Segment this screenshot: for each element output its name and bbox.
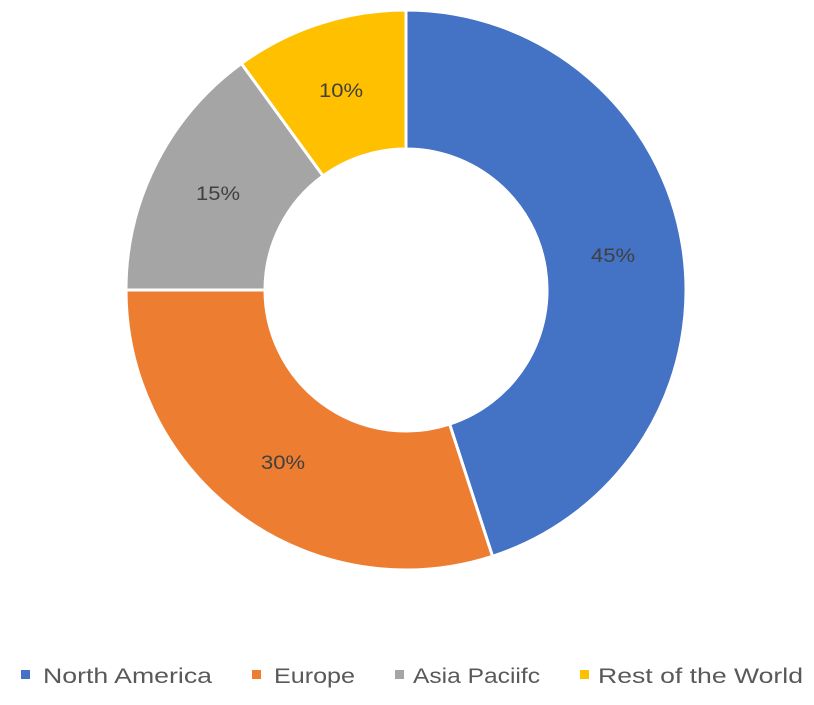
segment: Asia Pacific 15%	[126, 64, 323, 290]
legend item: North America: North America	[43, 665, 212, 688]
segment: Europe 30%	[126, 290, 492, 570]
legend item: North America	[21, 665, 212, 688]
segment: Rest of the World 10%	[241, 10, 406, 176]
legend item: Asia Pacific: Asia Paciifc	[413, 665, 540, 688]
legend	[21, 665, 803, 688]
data labels: 45%	[591, 246, 635, 267]
legend item: Europe	[252, 665, 355, 688]
data labels	[196, 81, 635, 474]
legend item: Europe: Europe	[274, 665, 355, 688]
data labels: 30%	[261, 453, 305, 474]
data labels: 10%	[319, 81, 363, 102]
legend item: Rest of the World: Rest of the World	[598, 665, 803, 688]
chart: donut	[126, 10, 686, 570]
segment: North America 45%	[406, 10, 686, 556]
data labels: 15%	[196, 184, 240, 205]
